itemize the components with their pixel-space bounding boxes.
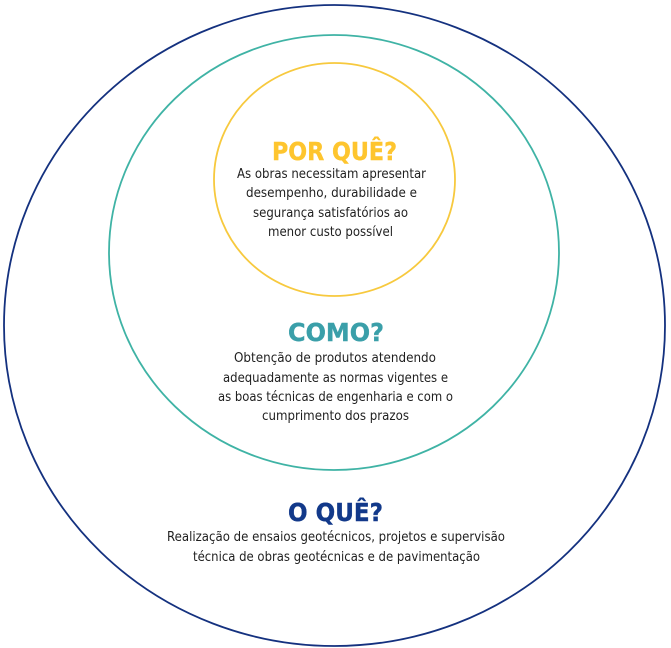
text block: por quê: desempenho, durabilidade e bbox=[246, 186, 417, 201]
text block: como: adequadamente as normas vigentes e bbox=[223, 371, 448, 386]
text block: como: as boas técnicas de engenharia e com o bbox=[218, 390, 453, 405]
text block: o quê bbox=[167, 530, 505, 565]
text block: como: cumprimento dos prazos bbox=[262, 409, 409, 424]
text block: o quê: técnica de obras geotécnicas e de pavimentação bbox=[193, 550, 480, 565]
text block: por quê: As obras necessitam apresentar bbox=[237, 167, 427, 182]
text block: como: Obtenção de produtos atendendo bbox=[234, 351, 436, 366]
text block: como bbox=[218, 351, 453, 424]
inner circle: POR QUÊ bbox=[214, 63, 455, 296]
text block: por quê: menor custo possível bbox=[268, 225, 393, 240]
text block: por quê: segurança satisfatórios ao bbox=[253, 206, 408, 221]
heading: O QUÊ?: O QUÊ? bbox=[288, 498, 383, 527]
heading: POR QUÊ?: POR QUÊ? bbox=[272, 137, 397, 166]
text block: o quê: Realização de ensaios geotécnicos, projetos e supervisão bbox=[167, 530, 505, 545]
text block: por quê bbox=[237, 167, 427, 240]
heading: COMO?: COMO? bbox=[288, 318, 384, 347]
middle circle: COMO bbox=[109, 35, 559, 470]
